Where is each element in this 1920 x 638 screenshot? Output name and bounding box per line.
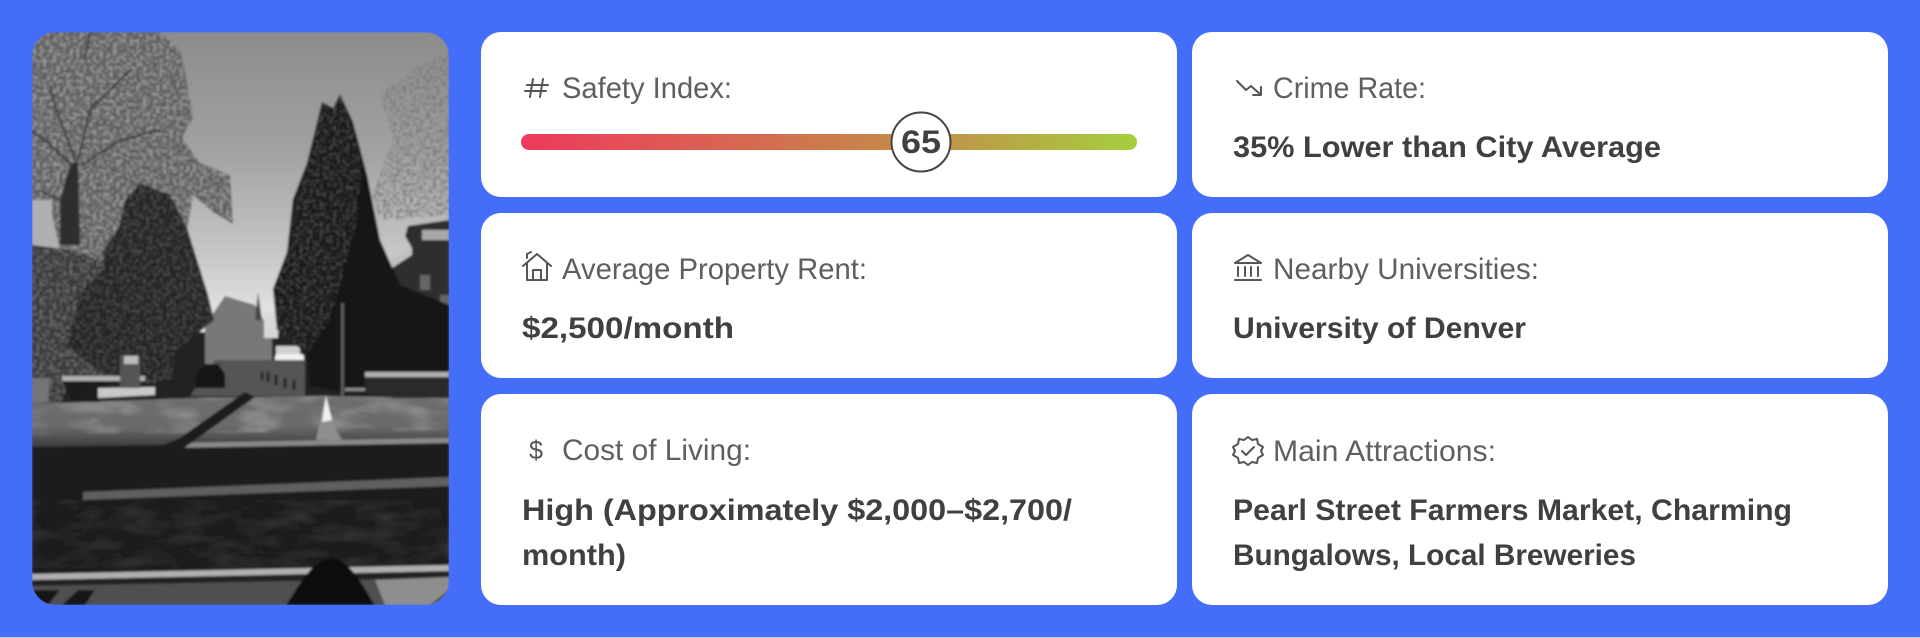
sky [160,32,449,334]
card: nearby universities [1192,213,1888,378]
label: safety index: Safety Index: [562,72,732,105]
icon: institution building [1235,255,1261,280]
ground behind car [190,360,305,396]
label: average property rent: Average Property Rent: [562,253,867,286]
card: safety index [481,32,1177,197]
light band across road [170,438,449,448]
card: crime rate [1192,32,1888,197]
value: main attractions [1233,494,1792,572]
label: cost of living: Cost of Living: [562,434,751,467]
value: cost of living: month) [522,539,626,572]
left large tree [32,32,233,262]
card: cost of living [481,394,1177,605]
right light tree [373,53,449,220]
dark road texture [32,500,449,568]
label: main attractions: Main Attractions: [1273,435,1496,468]
icon: hash [525,79,548,97]
value: cost of living [522,494,1073,572]
left conifer [67,183,214,385]
tree shadow across road [166,392,255,450]
icon: house [523,252,551,280]
distant trees [205,296,272,372]
label: nearby universities: Nearby Universities: [1273,253,1539,286]
right building [387,220,449,305]
distant buildings and van [264,312,304,368]
label: crime rate: Crime Rate: [1273,72,1426,105]
value: universities: University of Denver [1233,312,1526,345]
photo base [60,330,390,404]
icon: trending down [1237,81,1261,95]
road bollards [262,372,294,390]
slider track [521,134,1137,150]
value: cost of living: High (Approximately $2,000–$2,700/ [522,494,1073,527]
low garden walls [32,355,449,404]
slider knob with value: 65 [901,124,941,160]
icon: verified badge [1233,437,1263,465]
photographer's shadow [286,558,375,605]
value: rent: $2,500/month [522,312,734,345]
card: average property rent [481,213,1177,378]
traffic cone [315,404,342,441]
road lines [32,565,449,605]
grey road stripe [83,477,449,500]
left mid tree [32,244,106,402]
parked car [196,364,225,388]
slider knob with value [892,112,950,172]
value: main attractions: Pearl Street Farmers Market, Charming [1233,494,1792,527]
photo: tree-lined street in black and white [32,32,449,605]
card: main attractions [1192,394,1888,605]
right conifer [273,94,449,398]
value: crime rate: 35% Lower than City Average [1233,131,1661,164]
street surface [92,447,342,583]
value: main attractions: Bungalows, Local Breweries [1233,539,1636,572]
icon: dollar sign: $ [529,435,544,465]
